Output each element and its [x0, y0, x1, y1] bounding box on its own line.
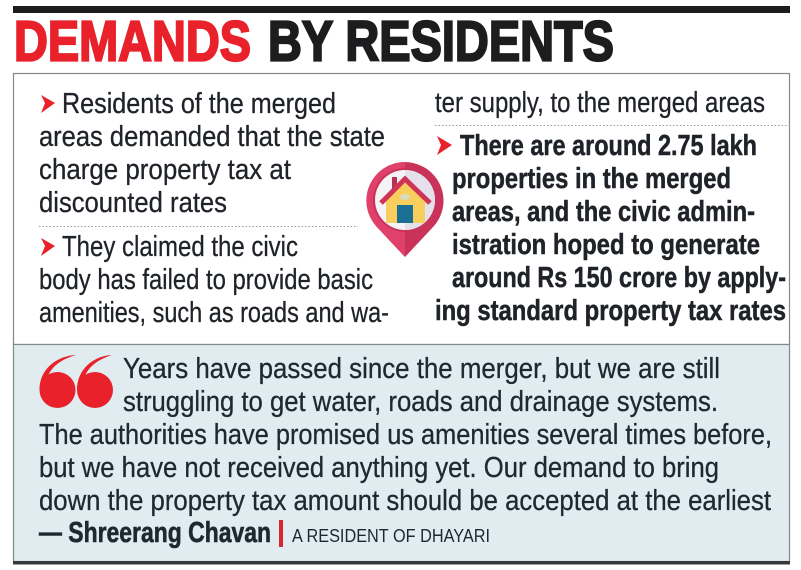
- text block: left column, second point: [39, 231, 389, 329]
- attribution: — Shreerang Chavan: [39, 517, 271, 549]
- text block: left column, first point: [39, 88, 385, 219]
- bullet arrow 3: [437, 136, 452, 155]
- panel: resident quote: [13, 344, 790, 564]
- quote text: but we have not received anything yet. Our demand to bring: [39, 452, 719, 484]
- title: BY RESIDENTS: [268, 10, 614, 74]
- icon: quotation marks: [39, 355, 113, 408]
- text block: left column, first point: discounted rates: [39, 187, 227, 219]
- attribution: A RESIDENT OF DHAYARI: [292, 526, 490, 546]
- title: [14, 10, 614, 74]
- text block: left column, second point: amenities, such as roads and wa-: [39, 297, 389, 329]
- icon: house map pin: [366, 162, 444, 257]
- text block: left column, first point: Residents of the merged: [62, 88, 336, 120]
- bullet arrow 1: [41, 95, 55, 113]
- text block: right column, bold point: properties in the merged: [452, 163, 731, 195]
- attribution: [39, 517, 490, 549]
- text block: left column, second point: body has failed to provide basic: [39, 264, 373, 296]
- text block: left column, second point: They claimed the civic: [62, 231, 298, 263]
- panel: demands: [14, 74, 790, 344]
- text block: left column, first point: areas demanded that the state: [39, 121, 385, 153]
- bullet arrow 2: [41, 238, 55, 256]
- text block: left column, first point: charge property tax at: [39, 154, 291, 186]
- text block: right column, bold point: [435, 130, 786, 327]
- quote text: Years have passed since the merger, but we are still: [123, 353, 720, 385]
- top black rule: [13, 6, 790, 13]
- title: DEMANDS: [14, 10, 251, 74]
- quote text: struggling to get water, roads and drainage systems.: [123, 386, 718, 418]
- quote text: [39, 353, 772, 517]
